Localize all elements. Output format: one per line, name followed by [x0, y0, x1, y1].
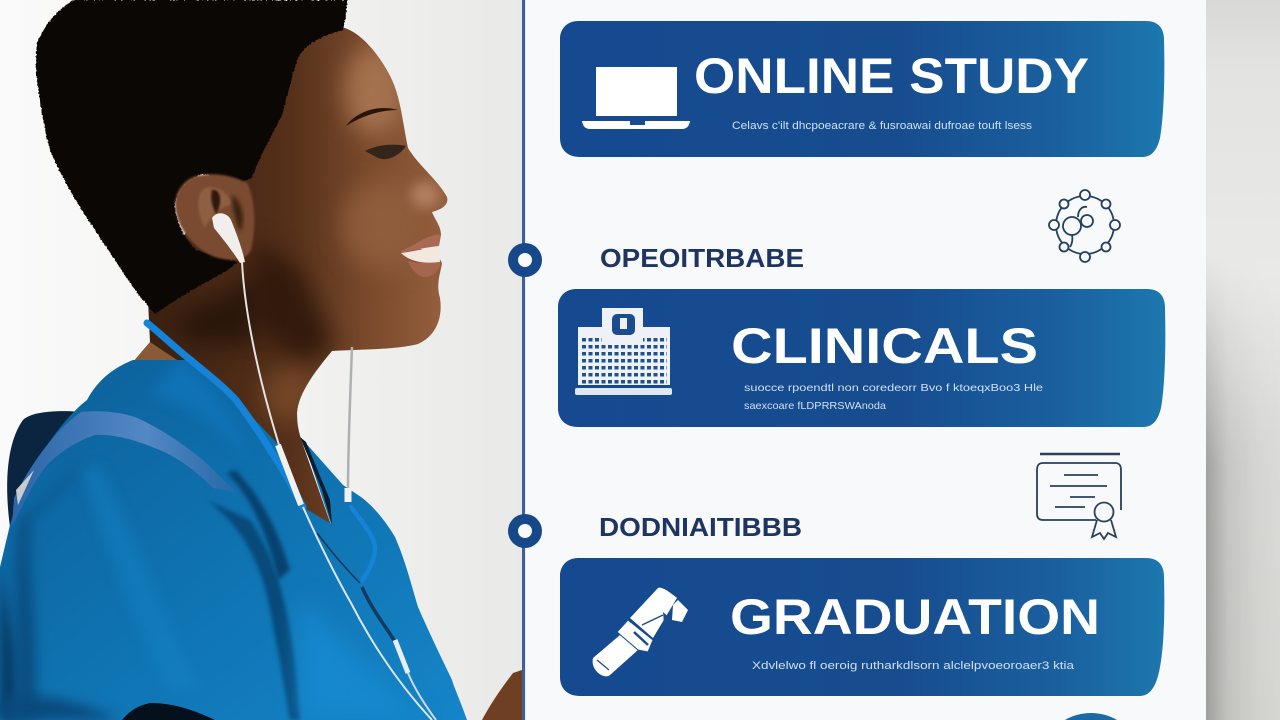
timeline node 1 — [508, 243, 542, 277]
forearm — [482, 670, 522, 720]
backpack — [7, 411, 82, 535]
card: online study — [560, 21, 1164, 157]
hair — [36, 0, 347, 314]
strap — [12, 411, 236, 527]
caption: online study: Celavs c'ilt dhcpoeacrare & fusroawai dufroae touft lsess — [732, 120, 1033, 132]
stethoscope tube — [147, 323, 303, 507]
collar V shadow — [300, 437, 332, 525]
mouth — [401, 246, 440, 263]
label: section two: DODNIAITIBBB — [599, 512, 802, 542]
neck and face — [133, 20, 447, 525]
eye — [365, 145, 406, 159]
card: clinicals — [558, 289, 1165, 427]
sleeve cuff shadow — [122, 703, 215, 720]
bottom circle cut by page edge — [1065, 713, 1117, 720]
eyebrow — [346, 108, 398, 126]
icon: diploma scroll — [593, 588, 688, 676]
earbud — [212, 213, 245, 263]
white infographic panel — [526, 0, 1206, 720]
ear — [175, 174, 254, 260]
heading: online study: ONLINE STUDY — [694, 48, 1089, 104]
strap frayed highlight — [16, 470, 34, 505]
icon: laptop — [582, 67, 690, 129]
timeline — [508, 0, 542, 720]
caption: clinicals: saexcoare fLDPRRSWAnoda — [744, 400, 886, 412]
caption: graduation: Xdvlelwo fl oeroig rutharkdlsorn alclelpvoeoroaer3 ktia — [752, 660, 1075, 672]
right side shadow band — [1206, 0, 1280, 720]
scrub top — [0, 360, 467, 720]
photo: student in blue scrubs — [0, 0, 522, 720]
label: section one: OPEOITRBABE — [600, 243, 804, 273]
heading: graduation: GRADUATION — [730, 589, 1100, 645]
background wall — [0, 0, 526, 720]
icon: hospital — [575, 308, 672, 395]
stethoscope second tube — [351, 507, 375, 581]
card: graduation — [560, 558, 1164, 696]
icon: certificate — [1037, 454, 1121, 539]
caption: clinicals: suocce rpoendtl non coredeorr Bvo f ktoeqxBoo3 Hle — [744, 382, 1043, 394]
icon: network brain — [1049, 190, 1120, 262]
timeline node 2 — [508, 514, 542, 548]
heading: clinicals: CLINICALS — [731, 318, 1038, 374]
earphone cables — [242, 262, 436, 720]
